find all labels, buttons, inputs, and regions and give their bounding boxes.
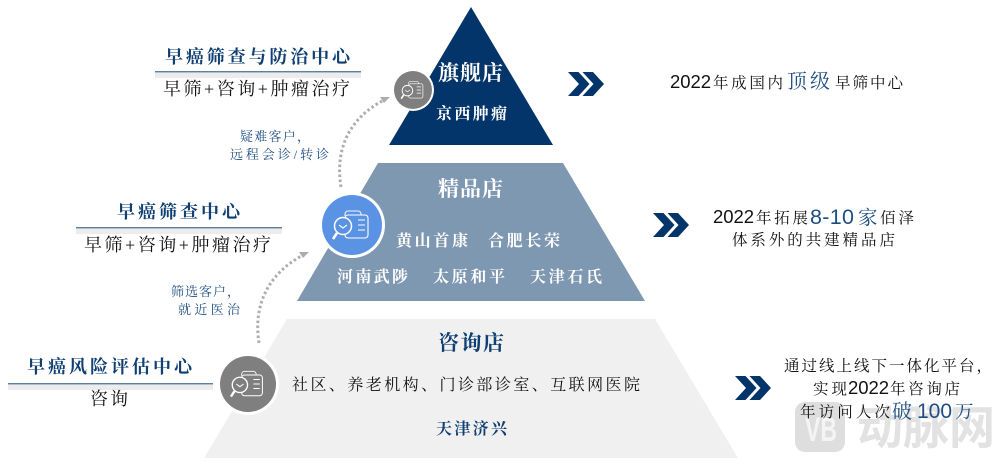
label: referral note lower xyxy=(171,284,241,317)
label: referral note upper: 疑难客户， xyxy=(240,129,310,145)
panel: middle tier boutique store xyxy=(297,163,645,301)
label: screening center: 早筛+咨询+肿瘤治疗 xyxy=(84,235,271,255)
watermark: 动脉网: 动脉网 xyxy=(857,402,995,454)
label: screening and prevention center: 早癌筛查与防治中心 xyxy=(165,46,353,67)
watermark: 动脉网: VB xyxy=(805,411,837,449)
arrow: chevrons bottom xyxy=(735,376,771,400)
text: boutique store names row 1: 黄山首康 xyxy=(396,231,468,250)
callout: bottom tier goal: 2022 xyxy=(848,377,889,398)
callout: middle tier goal: 家 xyxy=(858,207,878,229)
callout: middle tier goal: 体系外的共建精品店 xyxy=(732,231,895,249)
callout: bottom tier goal: 100 xyxy=(917,400,952,423)
heading: flagship store: 旗舰店 xyxy=(438,61,503,85)
callout: bottom tier goal: 年访问人次 xyxy=(800,402,890,421)
heading: boutique store: 精品店 xyxy=(438,177,503,201)
watermark: 动脉网 xyxy=(795,402,995,454)
text: boutique store names row 1 xyxy=(396,231,560,250)
arrow: chevrons top xyxy=(568,72,604,96)
label: screening and prevention center: 早筛+咨询+肿瘤治疗 xyxy=(163,79,350,99)
panel: bottom tier consultation store xyxy=(204,319,738,458)
callout: middle tier goal xyxy=(713,205,914,249)
text: boutique store names row 2 xyxy=(337,267,602,286)
text: Tianjin Jixing: 天津济兴 xyxy=(436,419,508,438)
icon: gray document search top xyxy=(392,69,434,111)
label: referral note upper: 远程会诊/转诊 xyxy=(230,147,329,162)
arrow: lower dotted referral curve xyxy=(258,252,309,343)
text: boutique store names row 1: 合肥长荣 xyxy=(488,231,560,250)
label: risk assessment center: 早癌风险评估中心 xyxy=(27,356,195,377)
text: boutique store names row 2: 太原和平 xyxy=(433,268,505,286)
text: consultation channels: 社区、养老机构、门诊部诊室、互联网医院 xyxy=(292,376,640,394)
callout: middle tier goal: 8-10 xyxy=(810,205,854,229)
callout: top tier goal: 早筛中心 xyxy=(835,74,903,92)
callout: bottom tier goal: 破 xyxy=(892,400,912,423)
label: risk assessment center xyxy=(8,356,213,409)
text: Jingxi Oncology: 京西肿瘤 xyxy=(436,104,507,123)
label: referral note upper xyxy=(230,129,329,162)
callout: top tier goal: 年成国内 xyxy=(713,73,783,92)
label: risk assessment center: 咨询 xyxy=(90,389,128,409)
callout: bottom tier goal xyxy=(784,357,992,423)
label: referral note lower: 就近医治 xyxy=(178,302,241,317)
callout: bottom tier goal: 实现 xyxy=(813,380,847,398)
text: boutique store names row 2: 河南武陟 xyxy=(337,267,408,286)
heading: consultation store: 咨询店 xyxy=(438,331,504,355)
callout: middle tier goal: 2022 xyxy=(713,206,754,227)
callout: middle tier goal: 佰泽 xyxy=(880,209,914,227)
callout: top tier goal xyxy=(670,70,903,93)
text: boutique store names row 2: 天津石氏 xyxy=(530,267,602,286)
label: screening center: 早癌筛查中心 xyxy=(117,201,243,222)
callout: bottom tier goal: 年咨询店 xyxy=(890,379,960,398)
arrow: upper dotted referral curve xyxy=(340,97,390,187)
callout: top tier goal: 顶级 xyxy=(787,70,830,93)
callout: middle tier goal: 年拓展 xyxy=(756,208,808,227)
label: screening and prevention center xyxy=(155,46,361,99)
icon: gray document search bottom xyxy=(217,353,279,415)
arrow: chevrons middle xyxy=(653,213,689,237)
label: referral note lower: 筛选客户， xyxy=(171,284,240,300)
panel: top tier flagship store xyxy=(389,7,553,145)
callout: top tier goal: 2022 xyxy=(670,71,711,92)
icon: blue document search xyxy=(319,192,385,258)
callout: bottom tier goal: 万 xyxy=(955,403,974,423)
label: screening center xyxy=(76,201,282,255)
callout: bottom tier goal: 通过线上线下一体化平台， xyxy=(784,357,992,375)
